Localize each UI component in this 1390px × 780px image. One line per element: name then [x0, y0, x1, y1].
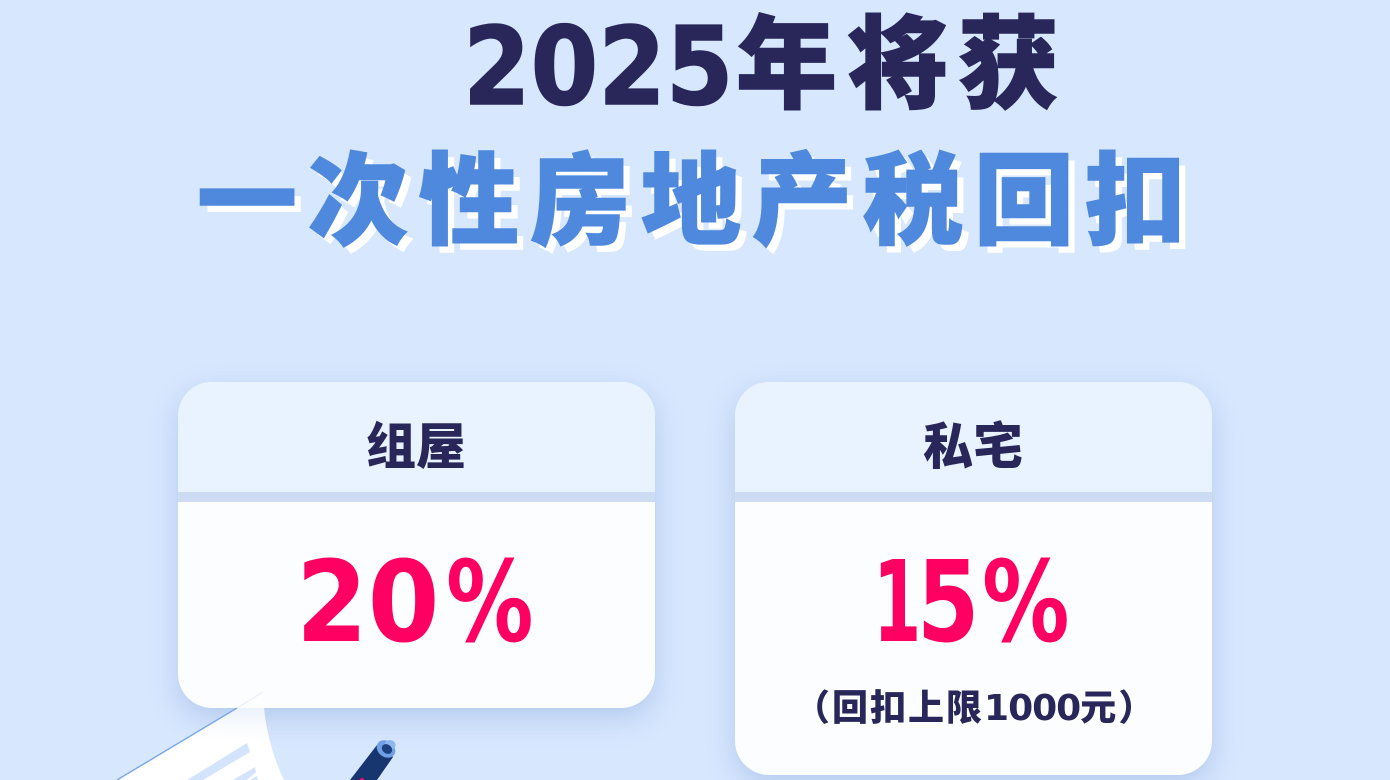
- title words: 年将获: [736, 10, 1069, 122]
- label: private property: 私宅: [923, 419, 1023, 475]
- digit 5: 5: [917, 538, 979, 668]
- icon: document: [116, 692, 284, 780]
- header: private property: [735, 382, 1212, 492]
- percent sign: %: [982, 538, 1070, 668]
- panel: private property: [735, 382, 1212, 775]
- panel: HDB flats: [178, 382, 655, 708]
- digits 20: 20: [296, 538, 439, 668]
- icon: pen: [350, 737, 399, 780]
- note: rebate cap: （回扣上限1000元）: [794, 687, 1156, 729]
- divider band: [178, 492, 655, 502]
- header: HDB flats: [178, 382, 655, 492]
- value: 15 percent: [873, 538, 1070, 668]
- label: HDB flats: 组屋: [366, 419, 466, 475]
- title line 2: 一次性房地产税回扣: [197, 146, 1196, 258]
- digit 1: 1: [873, 538, 921, 668]
- title year: 2025: [463, 5, 734, 130]
- title line 1: [463, 5, 1069, 130]
- divider band: [735, 492, 1212, 502]
- percent sign: %: [446, 538, 534, 668]
- value: 20 percent: [296, 538, 534, 668]
